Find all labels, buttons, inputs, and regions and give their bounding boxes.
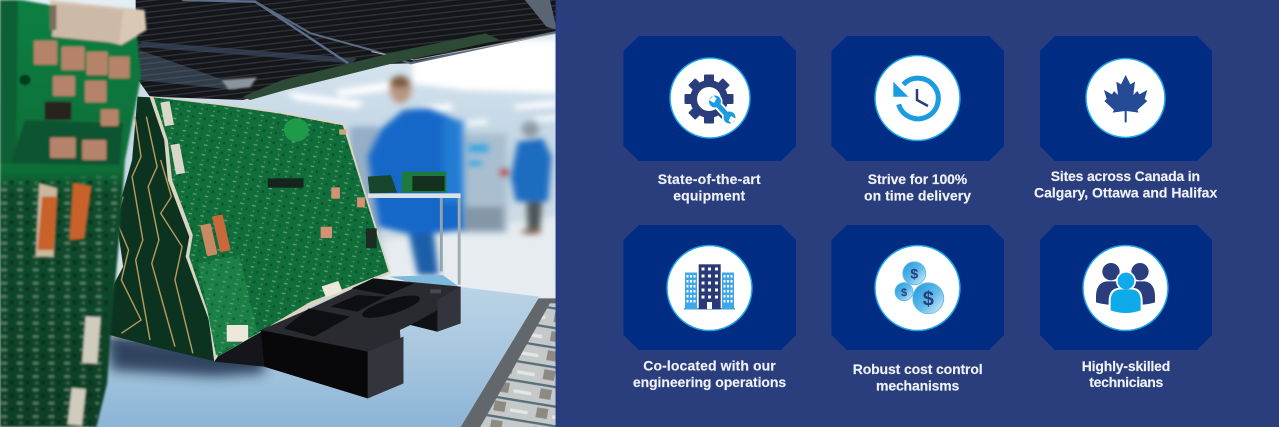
label: on time delivery: on time delivery (864, 188, 971, 204)
label: sites across Canada: Calgary, Ottawa and Halifax (1034, 184, 1217, 200)
label: co-located with engineering (633, 358, 786, 390)
tile: highly-skilled technicians (1040, 225, 1212, 390)
label: cost control (853, 361, 983, 394)
label: cost control: mechanisms (876, 378, 960, 394)
tile: sites across Canada (1034, 36, 1217, 200)
icon: clock with return arrow (875, 56, 960, 140)
tile: co-located with engineering (624, 225, 796, 390)
icon: dollar coins: $ (901, 287, 907, 299)
label: highly-skilled technicians: technicians (1089, 374, 1164, 390)
label: state-of-the-art equipment: equipment (673, 188, 746, 204)
cart with boards (368, 172, 461, 285)
label: on time delivery (864, 171, 971, 204)
tile: state-of-the-art equipment (624, 36, 796, 204)
label: on time delivery: Strive for 100% (868, 171, 968, 187)
photo: circuit boards on an assembly line with technicians (0, 0, 557, 427)
parts tray (461, 298, 557, 427)
ceiling lights (286, 40, 557, 125)
panel background (557, 0, 1279, 427)
back shelving (350, 127, 509, 240)
room background (0, 0, 557, 427)
wire shelf overhead (136, 0, 557, 100)
black board holder (214, 275, 461, 398)
label: co-located with engineering: engineering operations (633, 374, 786, 390)
label: co-located with engineering: Co-located with our (643, 358, 776, 374)
icon: office buildings (667, 246, 752, 330)
out-of-focus foreground board (0, 0, 146, 427)
work bench (89, 280, 539, 427)
blurred technician, background (511, 121, 552, 234)
label: cost control: Robust cost control (853, 361, 983, 377)
tile: cost control (832, 225, 1004, 394)
icon: dollar coins (875, 246, 960, 330)
label: highly-skilled technicians: Highly-skilled (1082, 358, 1170, 374)
icon: dollar coins: $ (910, 266, 918, 282)
label: sites across Canada: Sites across Canada in (1051, 168, 1200, 184)
label: state-of-the-art equipment (658, 171, 761, 204)
label: state-of-the-art equipment: State-of-the-art (658, 171, 761, 187)
icon: gear and wrench (670, 58, 750, 138)
tile: on time delivery (832, 36, 1004, 204)
label: highly-skilled technicians (1082, 358, 1170, 390)
icon: maple leaf (1086, 58, 1165, 138)
blurred technician, foreground (368, 75, 464, 275)
stacked boards behind (104, 97, 216, 362)
floor (386, 217, 557, 300)
icon: group of people (1083, 246, 1168, 330)
shadow under boards on the bench (105, 333, 264, 377)
label: sites across Canada (1034, 168, 1217, 200)
main circuit board (149, 96, 391, 362)
icon: dollar coins: $ (923, 288, 934, 310)
